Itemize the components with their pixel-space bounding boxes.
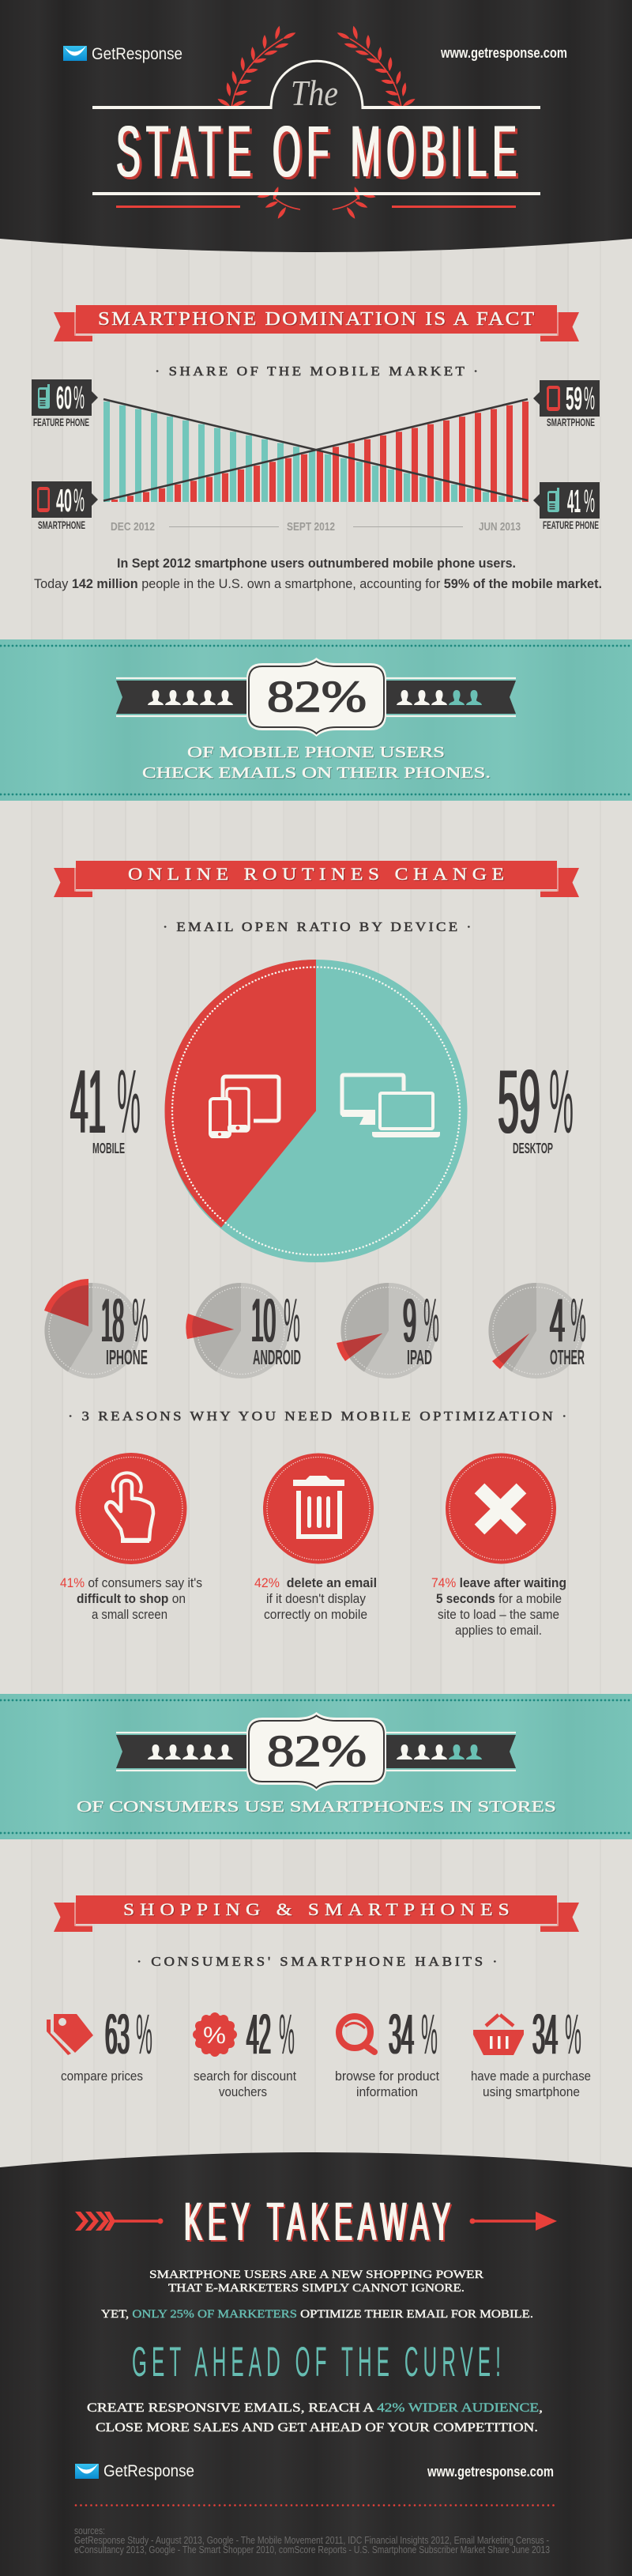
infographic canvas: % (132, 1285, 149, 1355)
trend lines (103, 399, 528, 501)
habit: made a purchase (471, 2004, 591, 2099)
callout: smartphone 40% (32, 481, 98, 531)
section ribbon: shopping and smartphones (54, 1895, 579, 1932)
caption: if it doesn't display (266, 1591, 366, 1606)
callout: feature phone 60%: 60 (56, 379, 72, 416)
reason 1: difficult to shop (60, 1453, 202, 1622)
mini pie: Android 10% (186, 1283, 301, 1379)
mini pie: iPhone 18% (44, 1279, 149, 1379)
callout: feature phone 41%: % (584, 483, 595, 519)
takeaway text: YET, ONLY 25% OF MARKETERS OPTIMIZE THEIR EMAIL FOR MOBILE. (101, 2308, 533, 2321)
teal bars: feature phone share (103, 402, 521, 502)
callout: feature phone 60% (32, 379, 98, 428)
website url: www.getresponse.com (427, 2464, 554, 2480)
title: State of Mobile: STATE OF MOBILE (116, 111, 517, 192)
text block: market summary (34, 556, 602, 591)
habit: compare prices: 63 (105, 2004, 130, 2066)
habit: made a purchase: using smartphone (483, 2084, 580, 2099)
callout: smartphone 40%: % (73, 482, 85, 519)
text block: market summary: Today 142 million people in the U.S. own a smartphone, accounting for 59% of the mobile market. (34, 576, 602, 591)
caption: 41% of consumers say it's (60, 1575, 202, 1590)
callout: smartphone 59%: 59 (566, 380, 582, 417)
mini pie: iPad 9%: IPAD (407, 1345, 432, 1369)
logo: GetResponse (63, 45, 182, 63)
caption: 74% leave after waiting (431, 1575, 566, 1590)
subheading: share of the mobile market: · SHARE OF THE MOBILE MARKET · (155, 364, 478, 379)
icon: touch hand (106, 1473, 153, 1541)
stat: 41% mobile (70, 1052, 141, 1156)
call to action text: CREATE RESPONSIVE EMAILS, REACH A 42% WIDER AUDIENCE , (87, 2401, 543, 2415)
mini pie: other 4%: 4 (550, 1285, 565, 1355)
habit: browse for product information: browse for product (335, 2069, 439, 2084)
heading: key takeaway: KEY TAKEAWAY (184, 2191, 450, 2252)
heading: get ahead of the curve: GET AHEAD OF THE CURVE! (132, 2338, 501, 2386)
callout: smartphone 59% (533, 380, 600, 428)
axis labels: DEC 2012 (111, 521, 155, 534)
section ribbon: online routines change: ONLINE ROUTINES CHANGE (128, 865, 504, 884)
caption: 5 seconds for a mobile (436, 1591, 562, 1606)
call to action text (87, 2401, 543, 2435)
habit: compare prices (47, 2004, 152, 2084)
section ribbon: online routines change (54, 861, 579, 897)
caption: correctly on mobile (264, 1607, 367, 1622)
logo: GetResponse: GetResponse (103, 2462, 194, 2480)
stat: 59% desktop: 59 (498, 1052, 540, 1152)
title frame rules and arch (92, 61, 540, 207)
caption: a small screen (92, 1607, 167, 1622)
statement text: OF MOBILE PHONE USERS (187, 744, 445, 761)
icon: shopping basket (473, 2015, 524, 2055)
sources: sources: (74, 2525, 105, 2536)
stat: 41% mobile: 41 (70, 1052, 106, 1152)
icon: percent seal: % (203, 2023, 226, 2049)
arrow: right head (469, 2212, 557, 2231)
pie chart: email open ratio by device (164, 960, 468, 1262)
icon: price tag (47, 2014, 93, 2055)
caption (254, 1575, 377, 1622)
callout: feature phone 60%: % (73, 379, 85, 416)
title: The: The (291, 73, 338, 113)
caption (431, 1575, 566, 1638)
takeaway text: THAT E-MARKETERS SIMPLY CANNOT IGNORE. (168, 2282, 465, 2295)
icon: desktop and laptop (342, 1075, 440, 1137)
sources (74, 2525, 550, 2555)
callout: smartphone 40%: SMARTPHONE (38, 519, 85, 531)
habit: compare prices: compare prices (61, 2069, 143, 2084)
statement text (142, 744, 491, 782)
infographic canvas: % (549, 1052, 574, 1152)
habit: made a purchase: % (565, 2004, 581, 2066)
takeaway text: SMARTPHONE USERS ARE A NEW SHOPPING POWER (149, 2269, 483, 2281)
mini pie: iPhone 18%: 18 (101, 1285, 124, 1355)
axis labels: SEPT 2012 (287, 521, 335, 534)
footer panel: key takeaway (0, 2152, 632, 2576)
section ribbon: smartphone domination (54, 305, 579, 341)
infographic canvas: % (279, 2004, 295, 2066)
infographic canvas: % (117, 1052, 141, 1152)
infographic canvas: % (570, 1285, 586, 1355)
takeaway text (101, 2269, 533, 2321)
stat: 59% desktop: DESKTOP (513, 1140, 553, 1156)
caption: applies to email. (455, 1623, 542, 1638)
subheading: email open ratio: · EMAIL OPEN RATIO BY DEVICE · (163, 919, 472, 934)
habit: made a purchase: 34 (532, 2004, 558, 2066)
habit: discount vouchers: vouchers (219, 2084, 267, 2099)
bar chart: share of the mobile market (103, 399, 529, 534)
laurel wreath (216, 25, 416, 220)
arrow: left fletching (75, 2212, 163, 2231)
reason 3: leave after 5 seconds (431, 1453, 566, 1638)
icon: mobile devices (209, 1077, 279, 1138)
icon: magnifier (339, 2016, 374, 2052)
mini pie: iPad 9% (337, 1283, 439, 1379)
callout: feature phone 41%: 41 (567, 483, 581, 519)
habit: made a purchase: have made a purchase (471, 2069, 591, 2084)
mini pie: iPad 9%: 9 (403, 1285, 416, 1355)
habit: discount vouchers (193, 2004, 296, 2099)
panel: 82% check emails (0, 639, 632, 801)
title: State of Mobile: STATE OF MOBILE (118, 114, 519, 194)
statement text: OF CONSUMERS USE SMARTPHONES IN STORES (77, 1798, 556, 1816)
caption (60, 1575, 202, 1622)
infographic canvas: % (423, 1285, 439, 1355)
mini pie: iPhone 18%: IPHONE (106, 1345, 148, 1369)
red bars: smartphone share (111, 402, 529, 502)
infographic canvas: % (284, 1285, 300, 1355)
mini pie: other 4% (488, 1283, 586, 1379)
section ribbon: smartphone domination: SMARTPHONE DOMINATION IS A FACT (98, 307, 535, 330)
stat: 41% mobile: MOBILE (92, 1140, 125, 1156)
habit: discount vouchers: search for discount (194, 2069, 296, 2084)
text block: market summary: In Sept 2012 smartphone users outnumbered mobile phone users. (117, 556, 516, 571)
mini pie: Android 10%: ANDROID (253, 1345, 301, 1369)
axis labels: JUN 2013 (479, 521, 521, 534)
callout: smartphone 40%: 40 (56, 482, 72, 519)
subheading: 3 reasons: · 3 REASONS WHY YOU NEED MOBILE OPTIMIZATION · (68, 1409, 566, 1424)
infographic canvas: % (136, 2004, 152, 2066)
statement text: CHECK EMAILS ON THEIR PHONES. (142, 764, 491, 782)
axis labels (111, 521, 521, 534)
infographic canvas: % (421, 2004, 438, 2066)
badge: 82% with people icons (116, 1712, 516, 1791)
habit: browse for product information (335, 2004, 439, 2099)
caption: site to load – the same (438, 1607, 559, 1622)
section ribbon: shopping and smartphones: SHOPPING & SMARTPHONES (123, 1900, 510, 1920)
callout: feature phone 41% (533, 482, 600, 531)
icon: trash can (293, 1476, 344, 1539)
call to action text: CLOSE MORE SALES AND GET AHEAD OF YOUR COMPETITION. (96, 2421, 538, 2435)
habit: discount vouchers: 42 (246, 2004, 271, 2066)
habit: browse for product information: information (356, 2084, 418, 2099)
reason 2: delete an email (254, 1453, 377, 1622)
habit: browse for product information: 34 (389, 2004, 414, 2066)
mini pie: other 4%: OTHER (550, 1345, 585, 1369)
website url: www.getresponse.com (440, 45, 567, 61)
subheading: smartphone habits: · CONSUMERS' SMARTPHONE HABITS · (137, 1954, 497, 1969)
callout: smartphone 59%: % (584, 380, 595, 417)
callout: feature phone 60%: FEATURE PHONE (33, 416, 89, 428)
callout: smartphone 59%: SMARTPHONE (547, 416, 595, 428)
mini pie: Android 10%: 10 (251, 1285, 276, 1355)
header panel (0, 0, 632, 252)
logo: GetResponse (75, 2462, 194, 2480)
caption: 42% delete an email (254, 1575, 377, 1590)
icon: x mark (480, 1488, 521, 1529)
caption: difficult to shop on (77, 1591, 186, 1606)
logo: GetResponse: GetResponse (92, 45, 182, 63)
heading: key takeaway: KEY TAKEAWAY (186, 2193, 452, 2254)
panel: 82% use smartphones in stores (0, 1694, 632, 1839)
badge: 82% with people icons (116, 658, 516, 737)
